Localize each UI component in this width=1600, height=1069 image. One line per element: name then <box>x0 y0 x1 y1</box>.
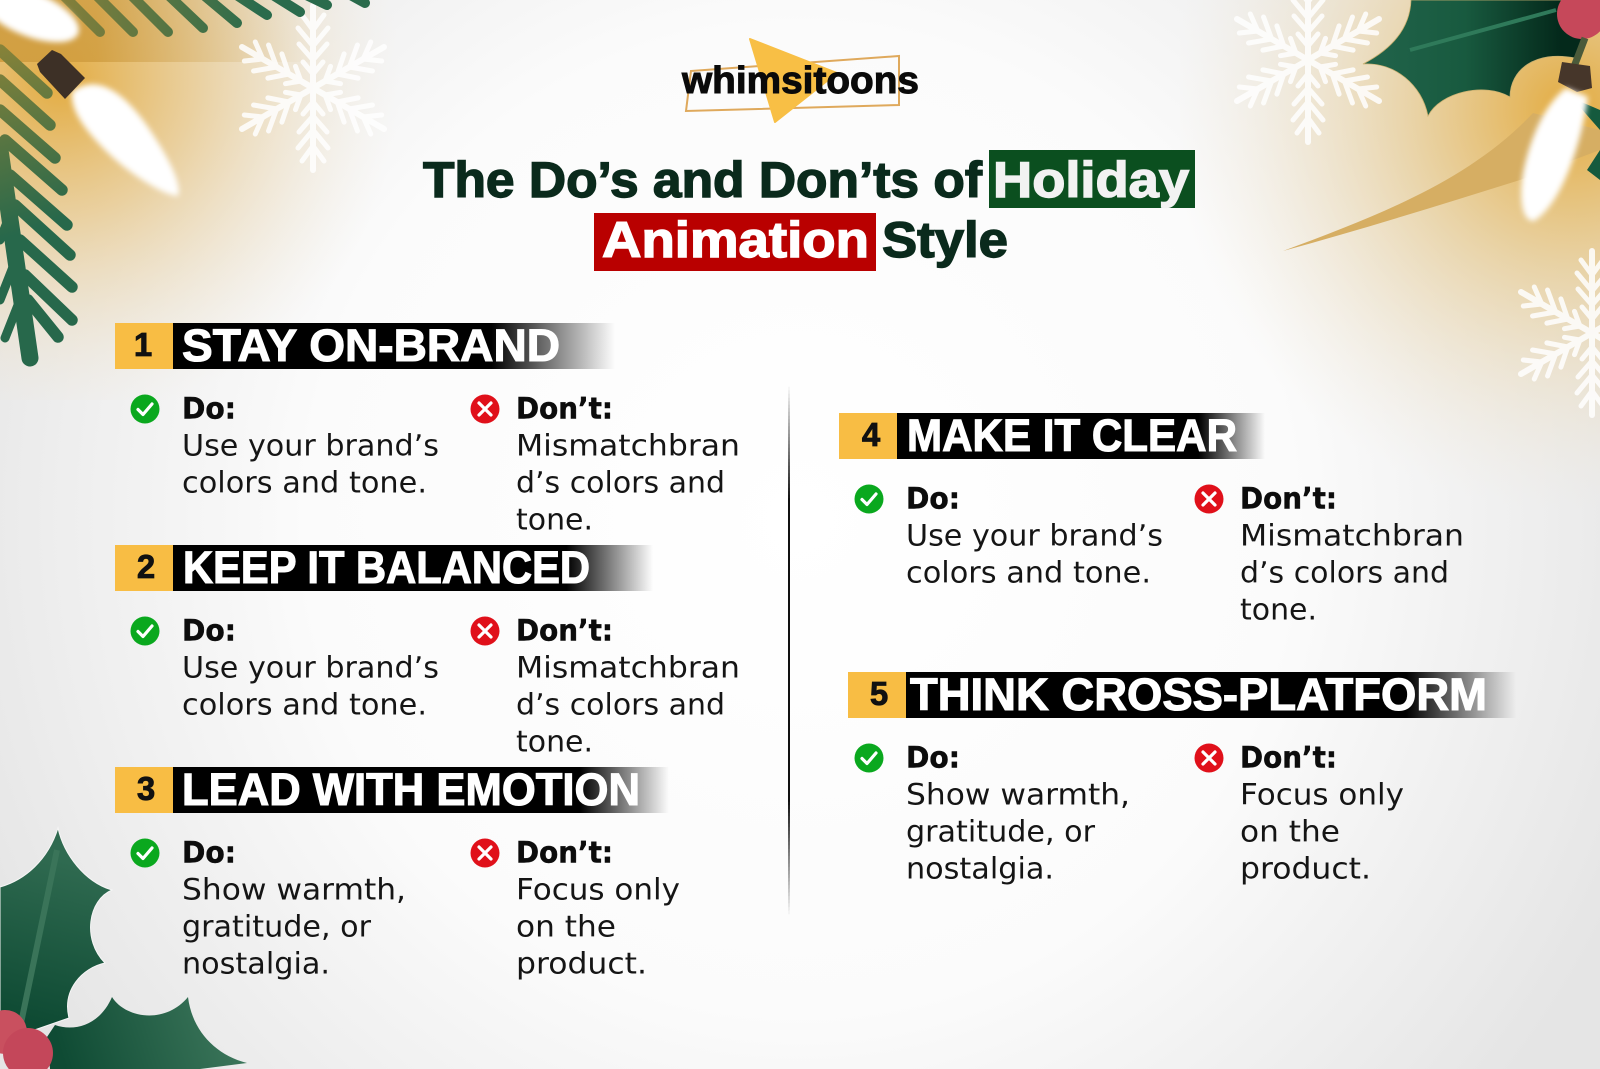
holly leaf upper <box>0 828 112 1035</box>
red berry <box>1557 0 1600 39</box>
snowflake upper <box>1229 0 1387 142</box>
highlight Holiday background <box>989 150 1195 208</box>
do text: Do: <box>906 740 960 774</box>
heading: MAKE IT CLEAR <box>907 410 1237 461</box>
golden glow <box>0 0 400 400</box>
icon: cross <box>1194 744 1224 772</box>
number: 1 <box>134 326 152 363</box>
dont text: d’s colors and <box>1240 556 1449 590</box>
red berry left <box>0 1010 27 1054</box>
heading bar <box>173 767 669 813</box>
bulb socket <box>37 50 85 99</box>
dont text: on the <box>516 910 616 944</box>
red berry right <box>3 1028 53 1069</box>
leaf vein <box>1410 10 1556 50</box>
do text: gratitude, or <box>182 910 371 944</box>
do text: Use your brand’s <box>906 518 1163 552</box>
section 2: keep it balanced <box>115 542 740 758</box>
do text: Do: <box>906 482 960 516</box>
number badge <box>848 672 906 718</box>
do text: Do: <box>182 836 236 870</box>
heading: THINK CROSS-PLATFORM <box>910 669 1487 720</box>
heading bar <box>897 413 1265 459</box>
do text: nostalgia. <box>182 946 330 980</box>
do text: Do: <box>182 614 236 648</box>
do text: Show warmth, <box>182 872 406 906</box>
light bulb main <box>72 84 179 196</box>
icon: cross <box>1194 484 1224 514</box>
title word Style: Style <box>882 212 1008 268</box>
dont text: tone. <box>516 502 593 536</box>
golden glow <box>1180 0 1600 520</box>
dont text: Don’t: <box>516 392 613 426</box>
icon: cross <box>470 838 500 868</box>
snowflake right <box>1513 251 1600 415</box>
section 4: make it clear <box>839 410 1464 626</box>
title <box>423 150 1195 271</box>
dont text: Don’t: <box>516 614 613 648</box>
number: 4 <box>862 416 881 453</box>
dont text: Don’t: <box>1240 740 1337 774</box>
holly leaf lower right <box>1572 98 1600 180</box>
icon: check <box>130 838 160 868</box>
icon: cross <box>470 394 500 424</box>
highlight Animation background <box>594 213 876 271</box>
do text: Use your brand’s <box>182 428 439 462</box>
holly leaf lower <box>47 997 247 1069</box>
number badge <box>115 767 173 813</box>
dont text: Don’t: <box>1240 482 1337 516</box>
do text: Use your brand’s <box>182 650 439 684</box>
do text: Show warmth, <box>906 778 1130 812</box>
dont text: Focus only <box>516 872 680 906</box>
dont text: d’s colors and <box>516 466 725 500</box>
dont text: tone. <box>1240 592 1317 626</box>
leaf vein <box>20 850 57 1028</box>
do text: colors and tone. <box>906 556 1151 590</box>
do text: colors and tone. <box>182 688 427 722</box>
gold leaf shadow <box>1283 113 1600 251</box>
bulb socket <box>1558 62 1592 92</box>
light beam <box>0 0 330 62</box>
highlight Holiday word: Holiday <box>993 152 1189 208</box>
dont text: product. <box>516 946 647 980</box>
snowflake <box>234 6 392 170</box>
logo <box>681 39 919 122</box>
logo frame <box>686 56 899 111</box>
dont text: d’s colors and <box>516 688 725 722</box>
dont text: Focus only <box>1240 778 1404 812</box>
fir branch top <box>60 0 365 32</box>
icon: check <box>130 394 160 424</box>
dont text: on the <box>1240 814 1340 848</box>
heading: KEEP IT BALANCED <box>183 542 590 593</box>
icon: cross <box>470 616 500 646</box>
highlight Animation word: Animation <box>602 212 869 268</box>
do text: colors and tone. <box>182 466 427 500</box>
heading bar <box>906 672 1516 718</box>
number: 3 <box>137 770 155 807</box>
icon: check <box>854 484 884 514</box>
number badge <box>115 545 173 591</box>
number badge <box>115 323 173 369</box>
bottom-left holly decoration <box>0 828 247 1069</box>
number: 5 <box>870 675 888 712</box>
do text: nostalgia. <box>906 852 1054 886</box>
stem <box>1572 38 1585 72</box>
logo play triangle <box>750 39 837 122</box>
number badge <box>839 413 897 459</box>
section 1: stay on-brand <box>115 320 740 536</box>
number: 2 <box>137 548 155 585</box>
top-right corner decoration: holly, glow, snowflakes and bulb <box>1180 0 1600 520</box>
center divider <box>788 385 790 916</box>
bulb <box>1521 88 1588 221</box>
light bulb top <box>0 0 86 54</box>
logo wordmark: whimsitoons <box>681 60 919 102</box>
section 3: lead with emotion <box>115 764 680 980</box>
dont text: Mismatchbran <box>516 428 740 462</box>
section 5: think cross-platform <box>848 669 1516 886</box>
heading: LEAD WITH EMOTION <box>182 764 640 815</box>
icon: check <box>854 744 884 772</box>
dont text: product. <box>1240 852 1371 886</box>
heading bar <box>173 323 615 369</box>
dont text: Mismatchbran <box>1240 518 1464 552</box>
heading bar <box>173 545 653 591</box>
dont text: Mismatchbran <box>516 650 740 684</box>
fir branch left <box>0 50 72 358</box>
title line 1: The Do’s and Don’ts of <box>423 152 982 208</box>
heading: STAY ON-BRAND <box>182 320 560 371</box>
do text: Do: <box>182 392 236 426</box>
icon: check <box>130 616 160 646</box>
top-left corner decoration: fir branches, glow, snowflake and light bulb <box>0 0 400 400</box>
dont text: tone. <box>516 724 593 758</box>
dont text: Don’t: <box>516 836 613 870</box>
holly leaf <box>1363 0 1600 116</box>
do text: gratitude, or <box>906 814 1095 848</box>
